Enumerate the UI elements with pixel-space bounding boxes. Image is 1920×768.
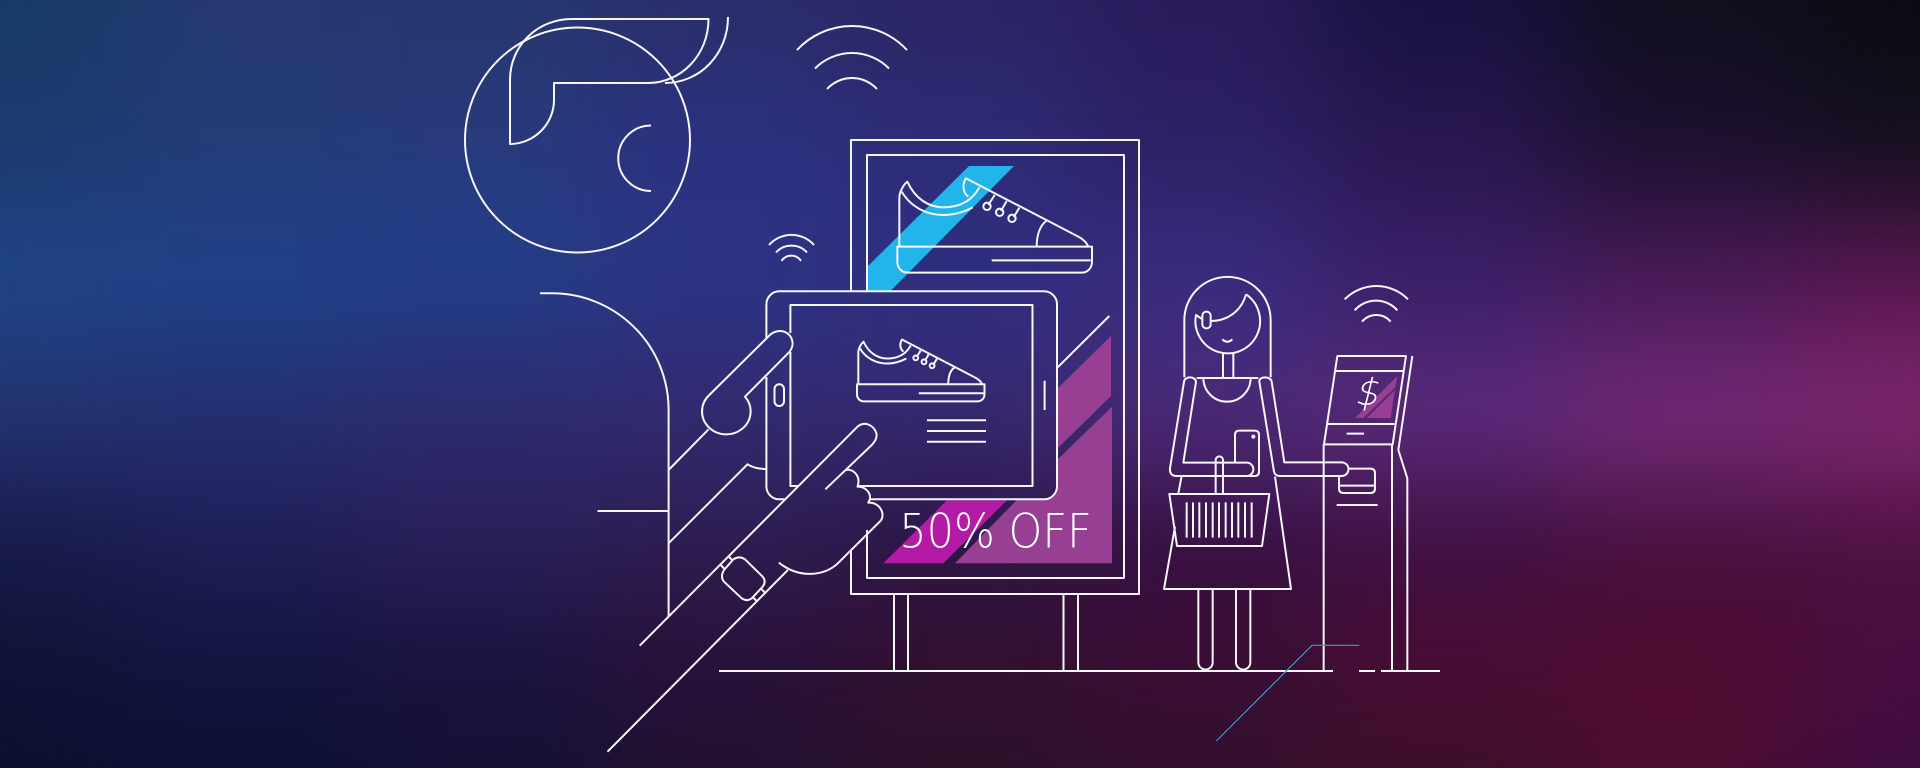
arm and torso of person [540, 293, 669, 617]
dress and arms [1164, 377, 1348, 669]
hair [1184, 277, 1271, 377]
shopping basket [1169, 456, 1269, 546]
blue diagonal stripe [867, 166, 1014, 290]
kiosk screen stripes [1355, 376, 1397, 418]
tablet [766, 291, 1057, 499]
tablet shoe [857, 340, 984, 401]
floor line [719, 670, 1440, 672]
phone [1235, 431, 1259, 476]
digital signage stand [851, 140, 1139, 671]
tablet body and screen [766, 291, 1057, 499]
signage frames and legs [851, 140, 1139, 671]
sign shoe [897, 178, 1092, 273]
wifi signal: tablet [769, 235, 814, 261]
wrist watch [721, 556, 766, 602]
kiosk body [1324, 286, 1412, 671]
hands holding and tapping tablet [607, 331, 883, 752]
woman shopper [1164, 277, 1348, 669]
magenta stripe [883, 500, 1007, 563]
person head with hair, seen from behind the tablet [465, 17, 728, 252]
wifi signal: large [797, 26, 907, 89]
right hand pointing [607, 424, 883, 752]
dollar sign: $ [1352, 371, 1386, 414]
face with headset [1195, 294, 1260, 377]
purple stripe lower [955, 407, 1112, 563]
purple stripe upper [1058, 336, 1111, 448]
payment kiosk [1324, 286, 1412, 671]
blue accent line [1216, 645, 1359, 741]
sale text: 50% OFF [899, 504, 1092, 559]
left hand with thumb [669, 331, 793, 543]
